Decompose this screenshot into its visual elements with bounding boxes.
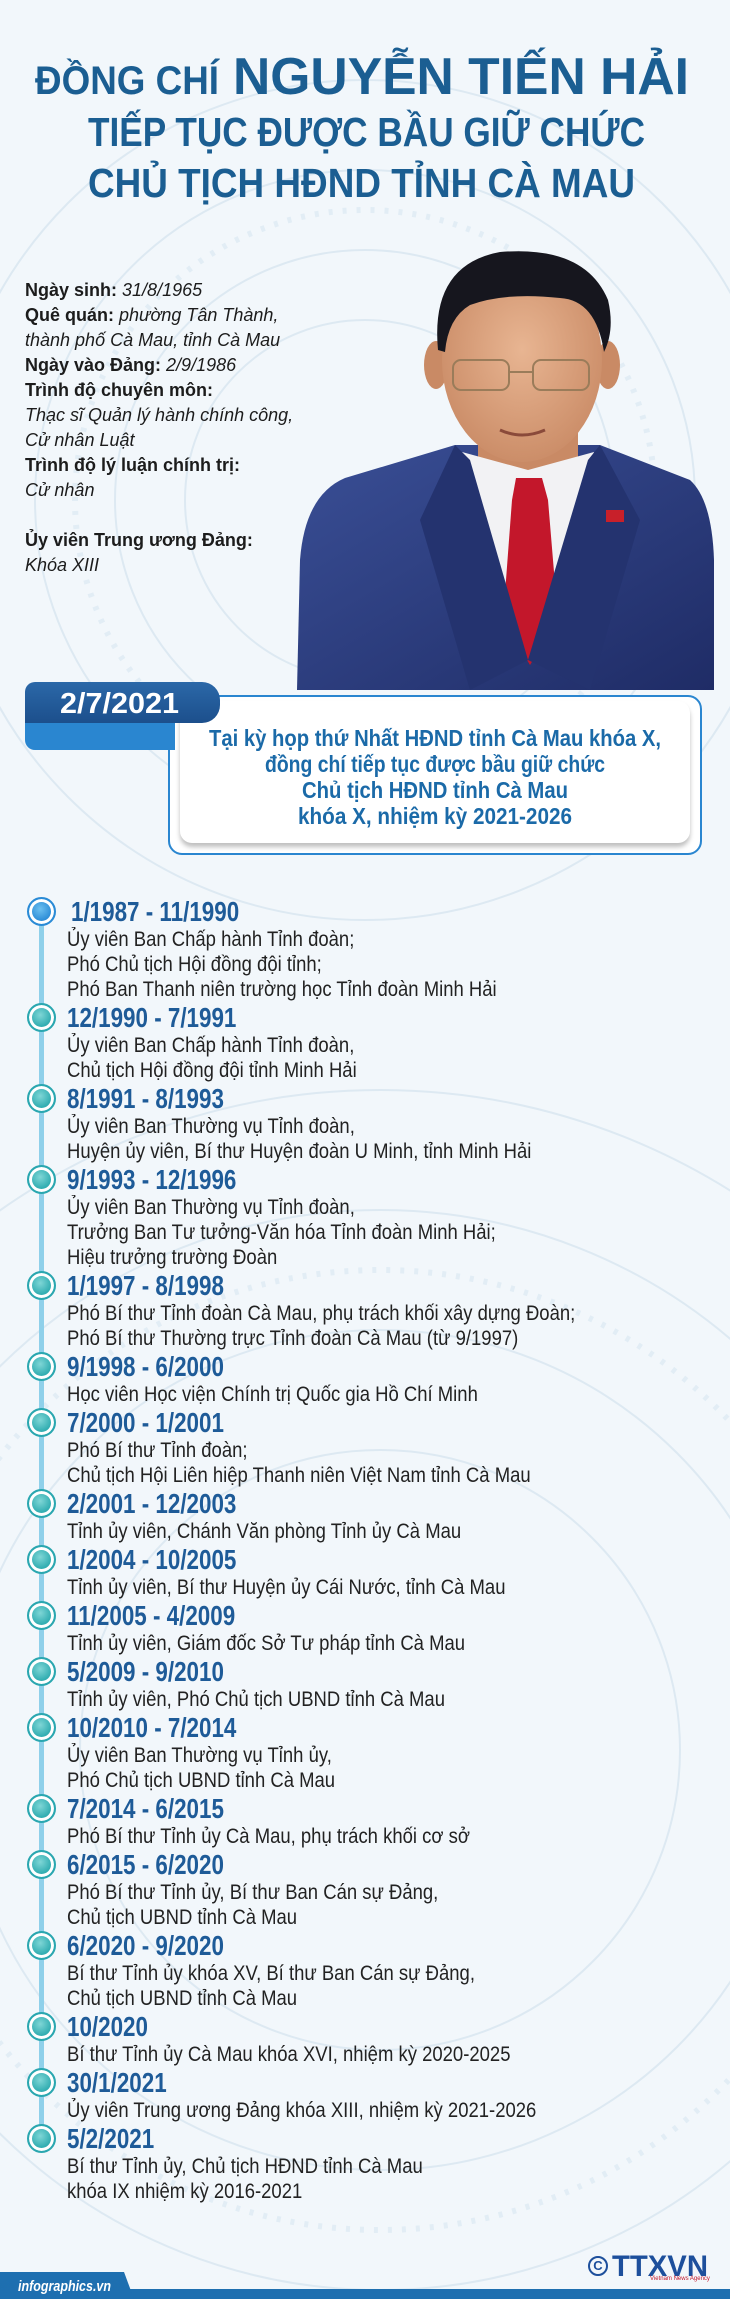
title: CHỦ TỊCH HĐND TỈNH CÀ MAU [88,160,635,206]
timeline [27,896,575,2203]
entry 1997: 1/1997 - 8/1998 [67,1270,224,1301]
entry 2015: Phó Bí thư Tỉnh ủy, Bí thư Ban Cán sự Đảng, [67,1881,438,1904]
entry 2001: Tỉnh ủy viên, Chánh Văn phòng Tỉnh ủy Cà Mau [67,1520,461,1543]
entry 2021a [27,2067,536,2122]
entry 1991: Huyện ủy viên, Bí thư Huyện đoàn U Minh, tỉnh Minh Hải [67,1140,531,1163]
entry 2015 [27,1849,438,1929]
entry 1993: Hiệu trưởng trường Đoàn [67,1246,277,1269]
entry 2004 [27,1544,505,1599]
info block: thành phố Cà Mau, tỉnh Cà Mau [25,330,280,350]
entry 1990: Ủy viên Ban Chấp hành Tỉnh đoàn, [67,1034,354,1057]
entry 2004: 1/2004 - 10/2005 [67,1544,236,1575]
entry 1993: Ủy viên Ban Thường vụ Tỉnh đoàn, [67,1196,355,1219]
entry 2020a [27,1930,475,2010]
info block: Ngày sinh: 31/8/1965 [25,280,202,300]
entry 1993: 9/1993 - 12/1996 [67,1164,236,1195]
entry 2021a: Ủy viên Trung ương Đảng khóa XIII, nhiệm kỳ 2021-2026 [67,2099,536,2122]
info block: Cử nhân Luật [25,430,134,450]
info block: Cử nhân [25,480,94,500]
entry 2005: Tỉnh ủy viên, Giám đốc Sở Tư pháp tỉnh Cà Mau [67,1632,465,1655]
entry 1987: Phó Ban Thanh niên trường học Tỉnh đoàn Minh Hải [67,978,497,1001]
entry 1990: Chủ tịch Hội đồng đội tỉnh Minh Hải [67,1059,357,1082]
entry 2014 [27,1793,470,1848]
entry 1987: Phó Chủ tịch Hội đồng đội tỉnh; [67,953,322,976]
entry 1993 [27,1164,496,1269]
entry 2001: 2/2001 - 12/2003 [67,1488,236,1519]
entry 2001 [27,1488,461,1543]
date tab: 2/7/2021 [25,682,220,750]
title [35,47,689,206]
title: ĐỒNG CHÍ [35,57,220,103]
entry 2015: 6/2015 - 6/2020 [67,1849,224,1880]
callout box: election [168,695,702,855]
entry 1990 [27,1002,357,1082]
entry 2005: 11/2005 - 4/2009 [67,1600,235,1631]
entry 2014: Phó Bí thư Tỉnh ủy Cà Mau, phụ trách khối cơ sở [67,1825,470,1848]
entry 2009: Tỉnh ủy viên, Phó Chủ tịch UBND tỉnh Cà Mau [67,1688,445,1711]
info block [25,280,293,575]
entry 1987: 1/1987 - 11/1990 [71,896,239,927]
footer bar [0,2272,730,2299]
entry 2000: 7/2000 - 1/2001 [67,1407,224,1438]
entry 2020a: Bí thư Tỉnh ủy khóa XV, Bí thư Ban Cán sự Đảng, [67,1962,475,1985]
info block: Ngày vào Đảng: 2/9/1986 [25,355,236,375]
entry 2020a: Chủ tịch UBND tỉnh Cà Mau [67,1987,297,2010]
date tab: 2/7/2021: 2/7/2021 [60,688,179,720]
callout box: election: Tại kỳ họp thứ Nhất HĐND tỉnh Cà Mau khóa X, [209,725,661,751]
entry 2021a: 30/1/2021 [67,2067,167,2098]
info block: Trình độ lý luận chính trị: [25,455,240,475]
entry 1987 [27,896,497,1001]
info block: Trình độ chuyên môn: [25,380,213,400]
portrait photo [297,251,714,690]
entry 2010: Ủy viên Ban Thường vụ Tỉnh ủy, [67,1744,332,1767]
entry 2014: 7/2014 - 6/2015 [67,1793,224,1824]
entry 2000: Phó Bí thư Tỉnh đoàn; [67,1439,248,1462]
entry 2010: Phó Chủ tịch UBND tỉnh Cà Mau [67,1769,335,1792]
entry 2020a: 6/2020 - 9/2020 [67,1930,224,1961]
callout box: election: khóa X, nhiệm kỳ 2021-2026 [298,803,572,829]
entry 1991 [27,1083,531,1163]
title: NGUYỄN TIẾN HẢI [233,47,689,106]
info block: Quê quán: phường Tân Thành, [25,305,278,325]
info block: Khóa XIII [25,555,99,575]
entry 1998 [27,1351,478,1406]
title: TIẾP TỤC ĐƯỢC BẦU GIỮ CHỨC [88,109,645,155]
entry 2021b: 5/2/2021 [67,2123,154,2154]
entry 2009: 5/2009 - 9/2010 [67,1656,224,1687]
info block: Thạc sĩ Quản lý hành chính công, [25,405,293,425]
entry 1993: Trưởng Ban Tư tưởng-Văn hóa Tỉnh đoàn Minh Hải; [67,1221,496,1244]
entry 2020b [27,2011,510,2066]
info block: Ủy viên Trung ương Đảng: [25,530,253,550]
entry 2009 [27,1656,445,1711]
entry 2005 [27,1600,465,1655]
logo: TTXVN: Vietnam News Agency [650,2276,710,2282]
entry 1997 [27,1270,575,1350]
entry 2021b: Bí thư Tỉnh ủy, Chủ tịch HĐND tỉnh Cà Mau [67,2155,423,2178]
entry 2010: 10/2010 - 7/2014 [67,1712,236,1743]
timeline line [39,912,44,2139]
entry 2015: Chủ tịch UBND tỉnh Cà Mau [67,1906,297,1929]
entry 1997: Phó Bí thư Tỉnh đoàn Cà Mau, phụ trách khối xây dựng Đoàn; [67,1302,575,1325]
entry 1998: Học viên Học viện Chính trị Quốc gia Hồ Chí Minh [67,1383,478,1406]
entry 2021b: khóa IX nhiệm kỳ 2016-2021 [67,2180,302,2203]
footer bar: infographics.vn [18,2278,111,2295]
entry 2000: Chủ tịch Hội Liên hiệp Thanh niên Việt Nam tỉnh Cà Mau [67,1464,531,1487]
callout box: election: đồng chí tiếp tục được bầu giữ chức [265,751,605,777]
entry 2004: Tỉnh ủy viên, Bí thư Huyện ủy Cái Nước, tỉnh Cà Mau [67,1576,505,1599]
entry 2021b [27,2123,423,2203]
callout box: election: Chủ tịch HĐND tỉnh Cà Mau [302,777,568,803]
entry 1997: Phó Bí thư Thường trực Tỉnh đoàn Cà Mau (từ 9/1997) [67,1327,518,1350]
entry 1991: Ủy viên Ban Thường vụ Tỉnh đoàn, [67,1115,355,1138]
entry 2020b: 10/2020 [67,2011,148,2042]
entry 1990: 12/1990 - 7/1991 [67,1002,236,1033]
entry 2020b: Bí thư Tỉnh ủy Cà Mau khóa XVI, nhiệm kỳ 2020-2025 [67,2043,510,2066]
entry 1991: 8/1991 - 8/1993 [67,1083,224,1114]
entry 1987: Ủy viên Ban Chấp hành Tỉnh đoàn; [67,928,354,951]
entry 2010 [27,1712,335,1792]
entry 1998: 9/1998 - 6/2000 [67,1351,224,1382]
entry 2000 [27,1407,531,1487]
logo: TTXVN: C [593,2258,603,2273]
